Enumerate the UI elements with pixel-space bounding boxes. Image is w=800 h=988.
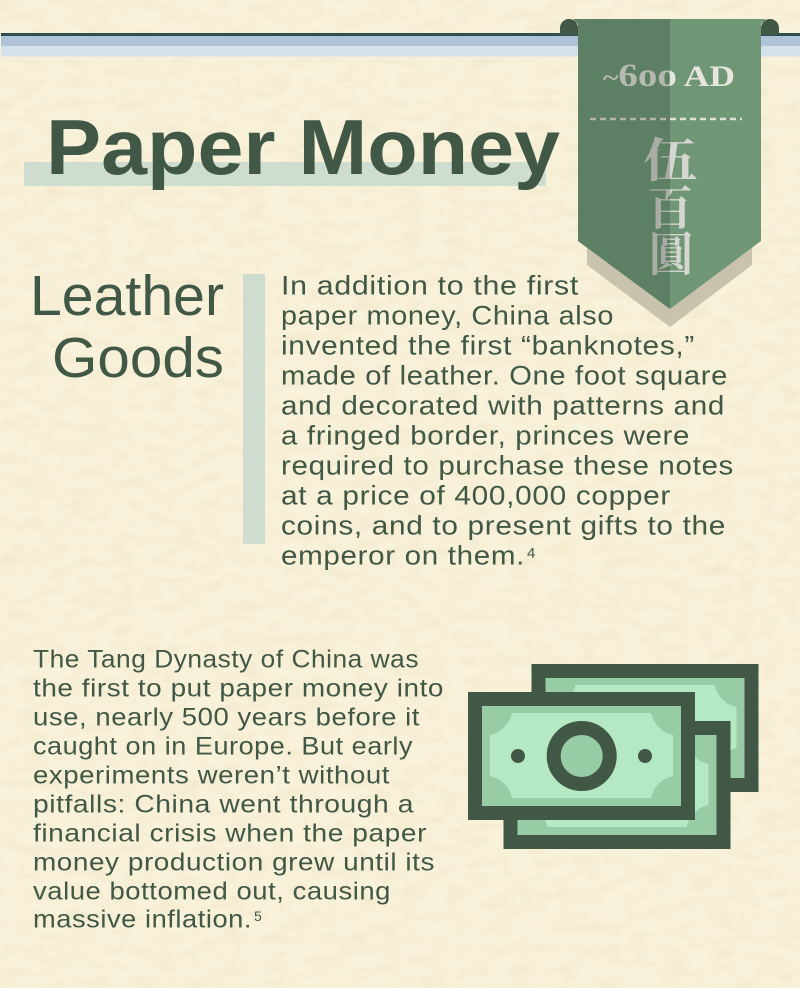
banner dashed divider — [590, 118, 742, 120]
text block: leather goods: at a price of 400,000 copper — [281, 480, 671, 510]
banner chinese characters: 圓 — [649, 218, 693, 285]
front note — [475, 699, 688, 813]
text block: leather goods — [281, 270, 734, 570]
text block: tang dynasty — [33, 646, 444, 934]
top ribbon band — [1, 33, 800, 56]
text block: leather goods: a fringed border, princes were — [281, 420, 690, 450]
text block: leather goods: and decorated with patterns and — [281, 390, 725, 420]
text block: leather goods: invented the first “banknotes,” — [281, 330, 695, 360]
text block: leather goods: paper money, China also — [281, 300, 614, 330]
text block: tang dynasty: use, nearly 500 years before it — [33, 704, 420, 732]
text block: tang dynasty: caught on in Europe. But early — [33, 732, 413, 760]
text block: tang dynasty: financial crisis when the paper — [33, 820, 427, 848]
text block: tang dynasty: 5 — [254, 908, 262, 924]
text block: leather goods: coins, and to present gifts to the — [281, 510, 726, 540]
text block: tang dynasty: experiments weren’t without — [33, 762, 390, 790]
banner body — [573, 19, 766, 309]
text block: tang dynasty: money production grew until its — [33, 848, 435, 876]
text block: leather goods: made of leather. One foot square — [281, 360, 728, 390]
text block: tang dynasty: pitfalls: China went through a — [33, 790, 414, 818]
banner date: ~6oo AD — [603, 58, 735, 94]
banner shadow — [587, 240, 752, 327]
banner chinese characters: 伍 — [643, 124, 697, 191]
heading: leather goods — [30, 264, 224, 390]
text block: tang dynasty: value bottomed out, causing — [33, 878, 391, 906]
text block: tang dynasty: The Tang Dynasty of China was — [33, 646, 419, 674]
banner curl right — [761, 19, 779, 35]
text block: leather goods: 4 — [527, 545, 535, 562]
vertical accent bar — [243, 274, 265, 544]
heading: leather goods: Goods — [52, 326, 224, 390]
text block: tang dynasty: massive inflation. — [33, 906, 252, 934]
banner chinese characters: 百 — [647, 172, 693, 239]
title highlight bar — [24, 162, 546, 186]
banner curl left — [560, 19, 578, 35]
text block: leather goods: emperor on them. — [281, 540, 525, 570]
banner chinese characters — [643, 124, 697, 285]
date banner — [560, 19, 779, 327]
back note — [538, 671, 752, 785]
heading: leather goods: Leather — [30, 264, 224, 328]
text block: tang dynasty: the first to put paper money into — [33, 674, 444, 702]
banner left shade — [573, 19, 670, 309]
middle note — [510, 728, 724, 842]
icon: banknotes — [475, 671, 752, 842]
text block: leather goods: required to purchase these notes — [281, 450, 734, 480]
title: Paper Money — [46, 103, 560, 191]
text block: leather goods: In addition to the first — [281, 270, 579, 300]
